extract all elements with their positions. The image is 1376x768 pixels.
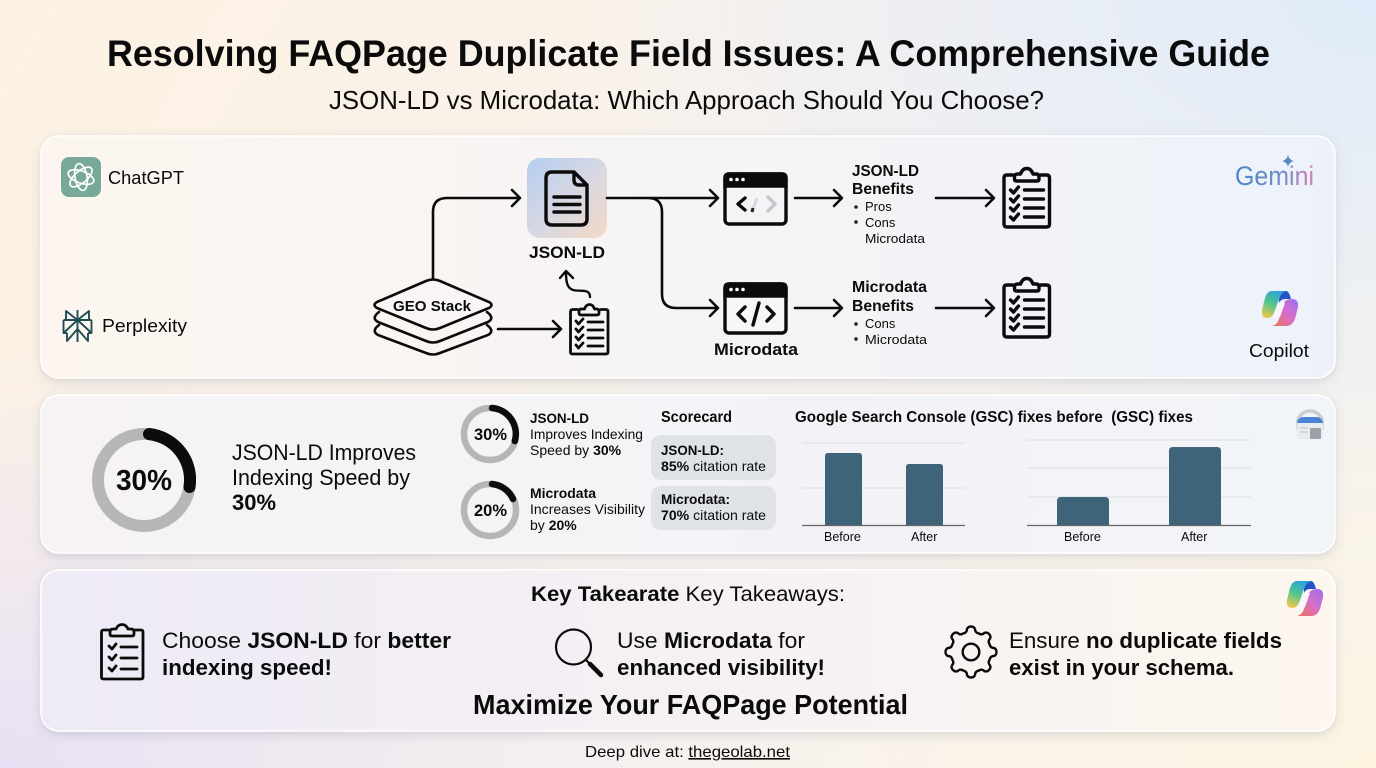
text: JSON-LD stat: Speed by 30% [530,442,622,458]
label: JSON-LD: JSON-LD [529,243,605,262]
arrow: GEO Stack to JSON-LD [433,190,520,278]
icon: ChatGPT [61,157,101,197]
text: JSON-LD improves indexing speed: Indexing Speed by [232,465,410,490]
takeaway: no duplicate fields [946,626,1282,680]
arrow: JSON-LD to windows [607,190,718,316]
card: JSON-LD citation rate: 85% citation rate [661,458,766,474]
text: JSON-LD benefits [852,163,926,246]
donut: 30 percent small [464,408,516,460]
arrow: checklist to JSON-LD [560,271,590,297]
subtitle: JSON-LD vs Microdata: Which Approach Should You Choose? [329,85,1044,115]
bar chart: left [802,443,965,544]
takeaway: choose JSON-LD: indexing speed! [162,655,332,680]
icon: Microdata checklist [1004,278,1050,337]
card: JSON-LD citation rate [651,435,776,480]
icon: JSON-LD document [527,158,607,238]
text: Microdata benefits: Cons [865,316,896,331]
icon: JSON-LD code window [725,174,786,224]
bar chart: right: After [1181,530,1207,544]
text: JSON-LD stat: Improves Indexing [530,426,643,442]
arrow: JSON-LD benefits to checklist [936,190,994,206]
icon: search console [1297,411,1323,439]
icon: Microdata code window [725,284,786,333]
footer: Deep dive at: thegeolab.net [585,744,791,761]
text: Microdata stat: Increases Visibility [530,501,645,517]
card: JSON-LD citation rate: JSON-LD: [661,442,724,458]
icon: GEO Stack layers [374,280,492,354]
logo: Gemini: Gemini [1235,161,1314,191]
donut: 30 percent large [98,434,190,526]
icon: Perplexity [64,310,92,342]
text: JSON-LD benefits: Cons [865,215,896,230]
text: JSON-LD improves indexing speed: 30% [232,490,276,515]
text: JSON-LD benefits: Pros [865,199,892,214]
takeaway: use Microdata [556,628,825,680]
takeaway: use Microdata: Use Microdata for [617,628,805,653]
title: Resolving FAQPage Duplicate Field Issues: A Comprehensive Guide [107,33,1270,74]
text: JSON-LD stat: JSON-LD [530,410,589,426]
heading: key takeaways: Key Takearate Key Takeaways: [531,583,845,606]
icon: Copilot [1262,291,1298,326]
text: Microdata benefits: Microdata [852,279,927,296]
icon: Copilot small [1287,581,1323,616]
takeaway: use Microdata: enhanced visibility! [617,655,825,680]
call to action: Maximize Your FAQPage Potential [473,689,908,720]
takeaway: choose JSON-LD [102,624,451,680]
text: JSON-LD benefits: Benefits [852,181,914,198]
arrow: window to JSON-LD benefits [795,190,842,206]
text: Microdata stat [530,485,645,533]
takeaway: choose JSON-LD: Choose JSON-LD for better [162,628,451,653]
text: Microdata benefits [852,279,928,347]
text: JSON-LD stat [530,410,643,458]
card: Microdata citation rate [651,486,776,530]
bar chart: left: After [911,530,937,544]
bar chart: right [1027,440,1251,544]
donut: 30 percent small: 30% [474,426,507,444]
text: Microdata benefits: Microdata [865,332,928,347]
panel: workflow [41,136,1335,378]
card: Microdata citation rate: 70% citation rate [661,507,766,523]
donut: 20 percent small [464,484,516,536]
text: JSON-LD improves indexing speed [232,440,416,515]
panel: key takeaways [41,570,1335,731]
arrow: GEO Stack to checklist [498,321,561,337]
label: Microdata: Microdata [714,340,799,359]
label: GEO Stack: GEO Stack [393,298,472,315]
text: JSON-LD benefits: JSON-LD [852,163,919,180]
icon: magnifier [556,630,601,675]
icon: clipboard [102,624,143,679]
bar chart: right: Before [1064,530,1101,544]
arrow: window to Microdata benefits [795,300,842,316]
icon: small checklist [570,304,608,354]
takeaway: no duplicate fields: Ensure no duplicate fields [1009,628,1282,653]
text: JSON-LD improves indexing speed: JSON-LD Improves [232,440,416,465]
donut: 30 percent large: 30% [116,465,172,497]
text: Microdata stat: Microdata [530,485,596,501]
heading: Scorecard: Scorecard [661,409,732,426]
card: Microdata citation rate: Microdata: [661,491,730,507]
label: Perplexity: Perplexity [102,316,187,336]
icon: gear [946,626,996,678]
takeaway: no duplicate fields: exist in your schema. [1009,655,1234,680]
icon: JSON-LD checklist [1004,168,1050,227]
label: ChatGPT: ChatGPT [108,168,184,188]
heading: GSC fixes: Google Search Console (GSC) fixes before (GSC) fixes [795,409,1193,426]
panel: metrics [41,395,1335,553]
arrow: Microdata benefits to checklist [936,300,994,316]
label: Copilot: Copilot [1249,341,1309,361]
donut: 20 percent small: 20% [474,502,507,520]
text: Microdata stat: by 20% [530,517,577,533]
bar chart: left: Before [824,530,861,544]
text: JSON-LD benefits: Microdata [865,231,926,246]
text: Microdata benefits: Benefits [852,298,914,315]
